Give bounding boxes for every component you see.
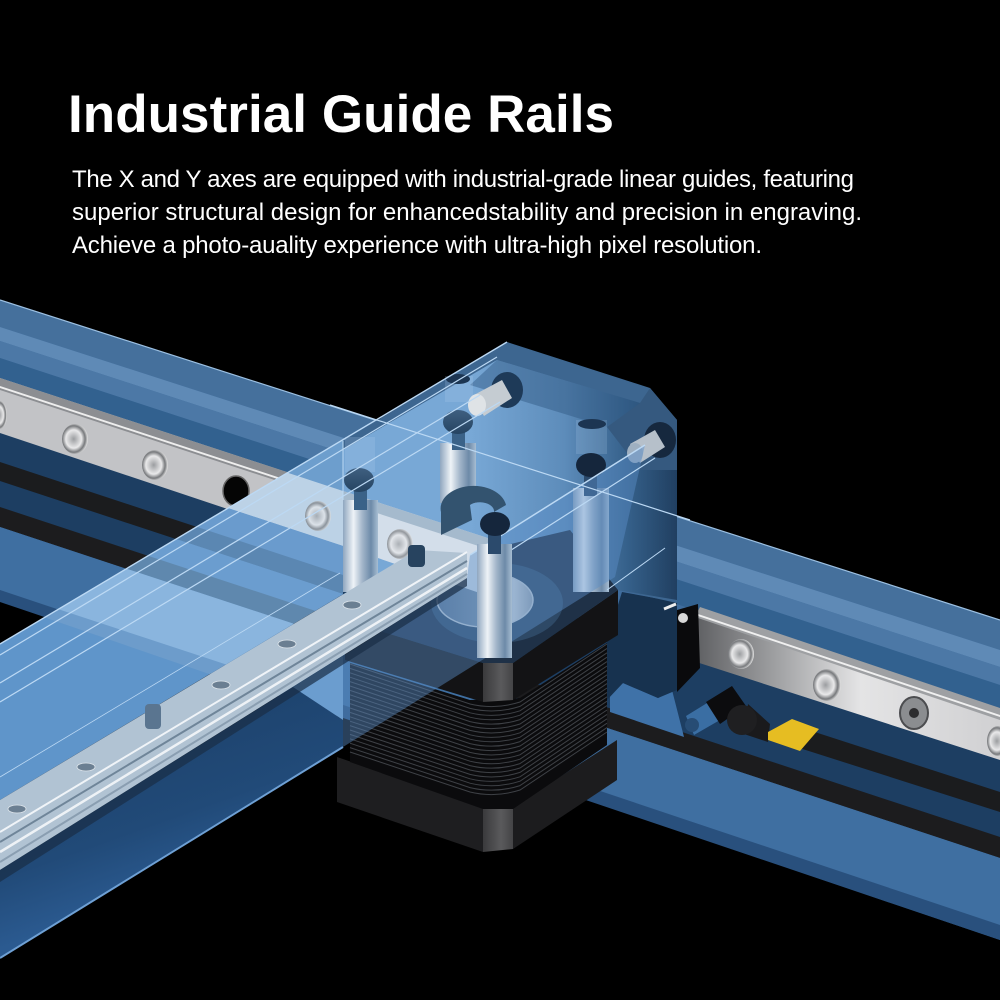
rail through glass, centre [343,491,500,600]
inner plate [343,360,677,600]
lower chamfer [483,807,513,852]
motor shaft ring [431,563,563,643]
lower block right face [513,740,617,849]
horizontal screw lower [627,422,676,463]
standoff posts [440,410,609,592]
body text: Achieve a photo-auality experience with ultra-high pixel resolution. [72,232,762,259]
lower beam edge [0,590,1000,940]
horizontal screw upper [468,372,523,416]
body text: superior structural design for enhancedstability and precision in engraving. [72,199,862,226]
motor shaft disc [437,573,533,627]
Y-axis glass beam bands [0,440,343,800]
lower block left face [337,757,483,852]
stepper motor [337,530,618,852]
slot top left [446,374,470,384]
top block left face [345,620,483,702]
right post [573,453,609,592]
beam upper stripes [0,300,1000,712]
bottom edge highlight [0,747,343,958]
back linear rail, left part [0,378,500,600]
ghost cylinder right [576,420,607,454]
rear post [440,410,476,503]
yellow clip [768,719,819,751]
box base plate glow [610,683,684,737]
back linear rail, right part [690,607,1000,760]
sensor pin [685,686,746,735]
bracket box [343,342,677,603]
body text [72,166,862,259]
X-axis back beam [0,300,1000,940]
beam top edge highlight [0,300,1000,620]
title: Industrial Guide Rails [68,85,614,144]
slot top right [578,419,606,429]
motor top face [345,530,618,663]
plate top shade [470,360,640,427]
glass edge lines [0,342,690,777]
fin lines [350,644,607,795]
cable plug [727,704,770,742]
top block right face [513,590,618,700]
left channel strip [0,462,300,580]
front post [477,512,512,658]
lower black strip [0,507,1000,858]
C-shaped coupler [441,486,506,535]
rail pins [145,545,425,729]
upper chamfer [483,663,513,702]
navy recess [0,430,1000,840]
cable [790,724,1000,812]
underside of front beam [0,656,343,958]
rail screws right [728,639,1000,756]
rail screw through glass [305,501,331,531]
sensor block [607,592,700,700]
glass overlay above motor [343,445,645,747]
fin stack [350,643,607,809]
left post [343,468,378,592]
rail shadow [0,578,467,882]
ghost cylinder left [445,376,473,402]
lower beam face [0,527,1000,925]
rail screws left [0,401,249,506]
ghost cylinder outer left [345,437,375,472]
body text: The X and Y axes are equipped with industrial-grade linear guides, featuring [72,166,854,193]
rail grooves [0,552,467,862]
rail holes [8,601,361,813]
corner recess [607,388,677,470]
front linear rail [0,545,467,882]
